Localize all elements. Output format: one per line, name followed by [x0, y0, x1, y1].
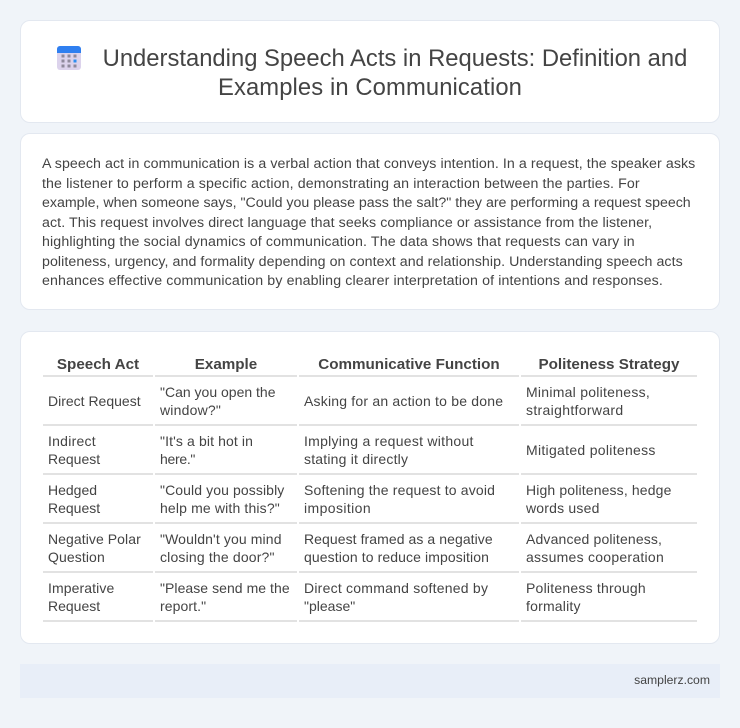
- row 1: politeness: Minimal politeness,: [526, 384, 650, 400]
- row 3: speech act: Hedged: [48, 482, 97, 498]
- row 5: example: [160, 580, 290, 614]
- row 3: politeness: High politeness, hedge: [526, 482, 672, 498]
- description text: enhances effective communication by enabling clearer interpretation of intentions and responses.: [42, 273, 663, 289]
- description text: politeness, urgency, and formality depending on context and relationship. Understanding speech acts: [42, 254, 683, 270]
- description text: the listener to perform a specific action, demonstrating an interaction between the parties. For: [42, 176, 640, 192]
- panel: table card: [20, 331, 720, 644]
- description text: example, when someone says, "Could you please pass the salt?" they are performing a request speech: [42, 195, 691, 211]
- row 5: speech act: [48, 580, 114, 614]
- row 3: example: [160, 482, 284, 516]
- row 5: speech act: Request: [48, 598, 100, 614]
- row 4: politeness: Advanced politeness,: [526, 531, 662, 547]
- header: Communicative Function: Communicative Function: [318, 356, 500, 373]
- row 4: politeness: assumes cooperation: [526, 549, 664, 565]
- row 2: function: [304, 433, 474, 467]
- row 3: politeness: [526, 482, 672, 516]
- row 2: speech act: Request: [48, 451, 100, 467]
- row 3: speech act: [48, 482, 100, 516]
- row 3: speech act: Request: [48, 500, 100, 516]
- header: Example: Example: [195, 356, 257, 373]
- row 3: function: Softening the request to avoid: [304, 482, 495, 498]
- description text: [42, 156, 695, 289]
- row 5: example: "Please send me the: [160, 580, 290, 596]
- row 1: politeness: [526, 384, 650, 418]
- row 2: function: stating it directly: [304, 451, 408, 467]
- row 4: function: [304, 531, 493, 565]
- row 3: function: imposition: [304, 500, 371, 516]
- row 4: function: question to reduce imposition: [304, 549, 489, 565]
- description text: A speech act in communication is a verbal action that conveys intention. In a request, the speaker asks: [42, 156, 695, 172]
- row 2: example: "It's a bit hot in: [160, 433, 253, 449]
- row 1: politeness: straightforward: [526, 402, 624, 418]
- row 5: example: report.": [160, 598, 206, 614]
- row 1: speech act: Direct Request: [48, 393, 141, 409]
- row 4: example: "Wouldn't you mind: [160, 531, 282, 547]
- footer bar: [20, 664, 720, 698]
- row 3: function: [304, 482, 495, 516]
- row 3: example: "Could you possibly: [160, 482, 284, 498]
- row 1: function: Asking for an action to be done: [304, 393, 503, 409]
- row 2: speech act: [48, 433, 100, 467]
- row 4: example: closing the door?": [160, 549, 275, 565]
- title: Examples in Communication: [218, 74, 522, 101]
- row 5: function: [304, 580, 488, 614]
- row 2: speech act: Indirect: [48, 433, 96, 449]
- row 1: example: [160, 384, 276, 418]
- row 2: politeness: Mitigated politeness: [526, 442, 656, 458]
- row 5: function: Direct command softened by: [304, 580, 488, 596]
- row 3: politeness: words used: [526, 500, 600, 516]
- row 2: function: Implying a request without: [304, 433, 474, 449]
- row 5: politeness: Politeness through: [526, 580, 646, 596]
- row 4: function: Request framed as a negative: [304, 531, 493, 547]
- row 5: function: "please": [304, 598, 355, 614]
- title: [103, 45, 687, 101]
- row 4: speech act: Question: [48, 549, 105, 565]
- description text: highlighting the social dynamics of communication. The data shows that requests can vary in: [42, 234, 635, 250]
- row 2: example: here.": [160, 451, 195, 467]
- panel: description card: [20, 133, 720, 310]
- footer text: samplerz.com: [634, 673, 710, 687]
- row 3: example: help me with this?": [160, 500, 280, 516]
- panel: title card: [20, 20, 720, 123]
- description text: act. This request involves direct language that seeks compliance or assistance from the listener,: [42, 214, 652, 230]
- table: [43, 356, 697, 622]
- row 1: example: "Can you open the: [160, 384, 276, 400]
- row 4: politeness: [526, 531, 664, 565]
- row 4: speech act: [48, 531, 141, 565]
- row 5: politeness: [526, 580, 646, 614]
- row 1: example: window?": [160, 402, 221, 418]
- header: Speech Act: Speech Act: [57, 356, 139, 373]
- row 5: speech act: Imperative: [48, 580, 114, 596]
- row 4: speech act: Negative Polar: [48, 531, 141, 547]
- row 5: politeness: formality: [526, 598, 581, 614]
- icon: calendar grid: [57, 46, 81, 70]
- row 4: example: [160, 531, 282, 565]
- row 2: example: [160, 433, 253, 467]
- header: Politeness Strategy: Politeness Strategy: [539, 356, 679, 373]
- title: Understanding Speech Acts in Requests: Definition and: [103, 45, 687, 72]
